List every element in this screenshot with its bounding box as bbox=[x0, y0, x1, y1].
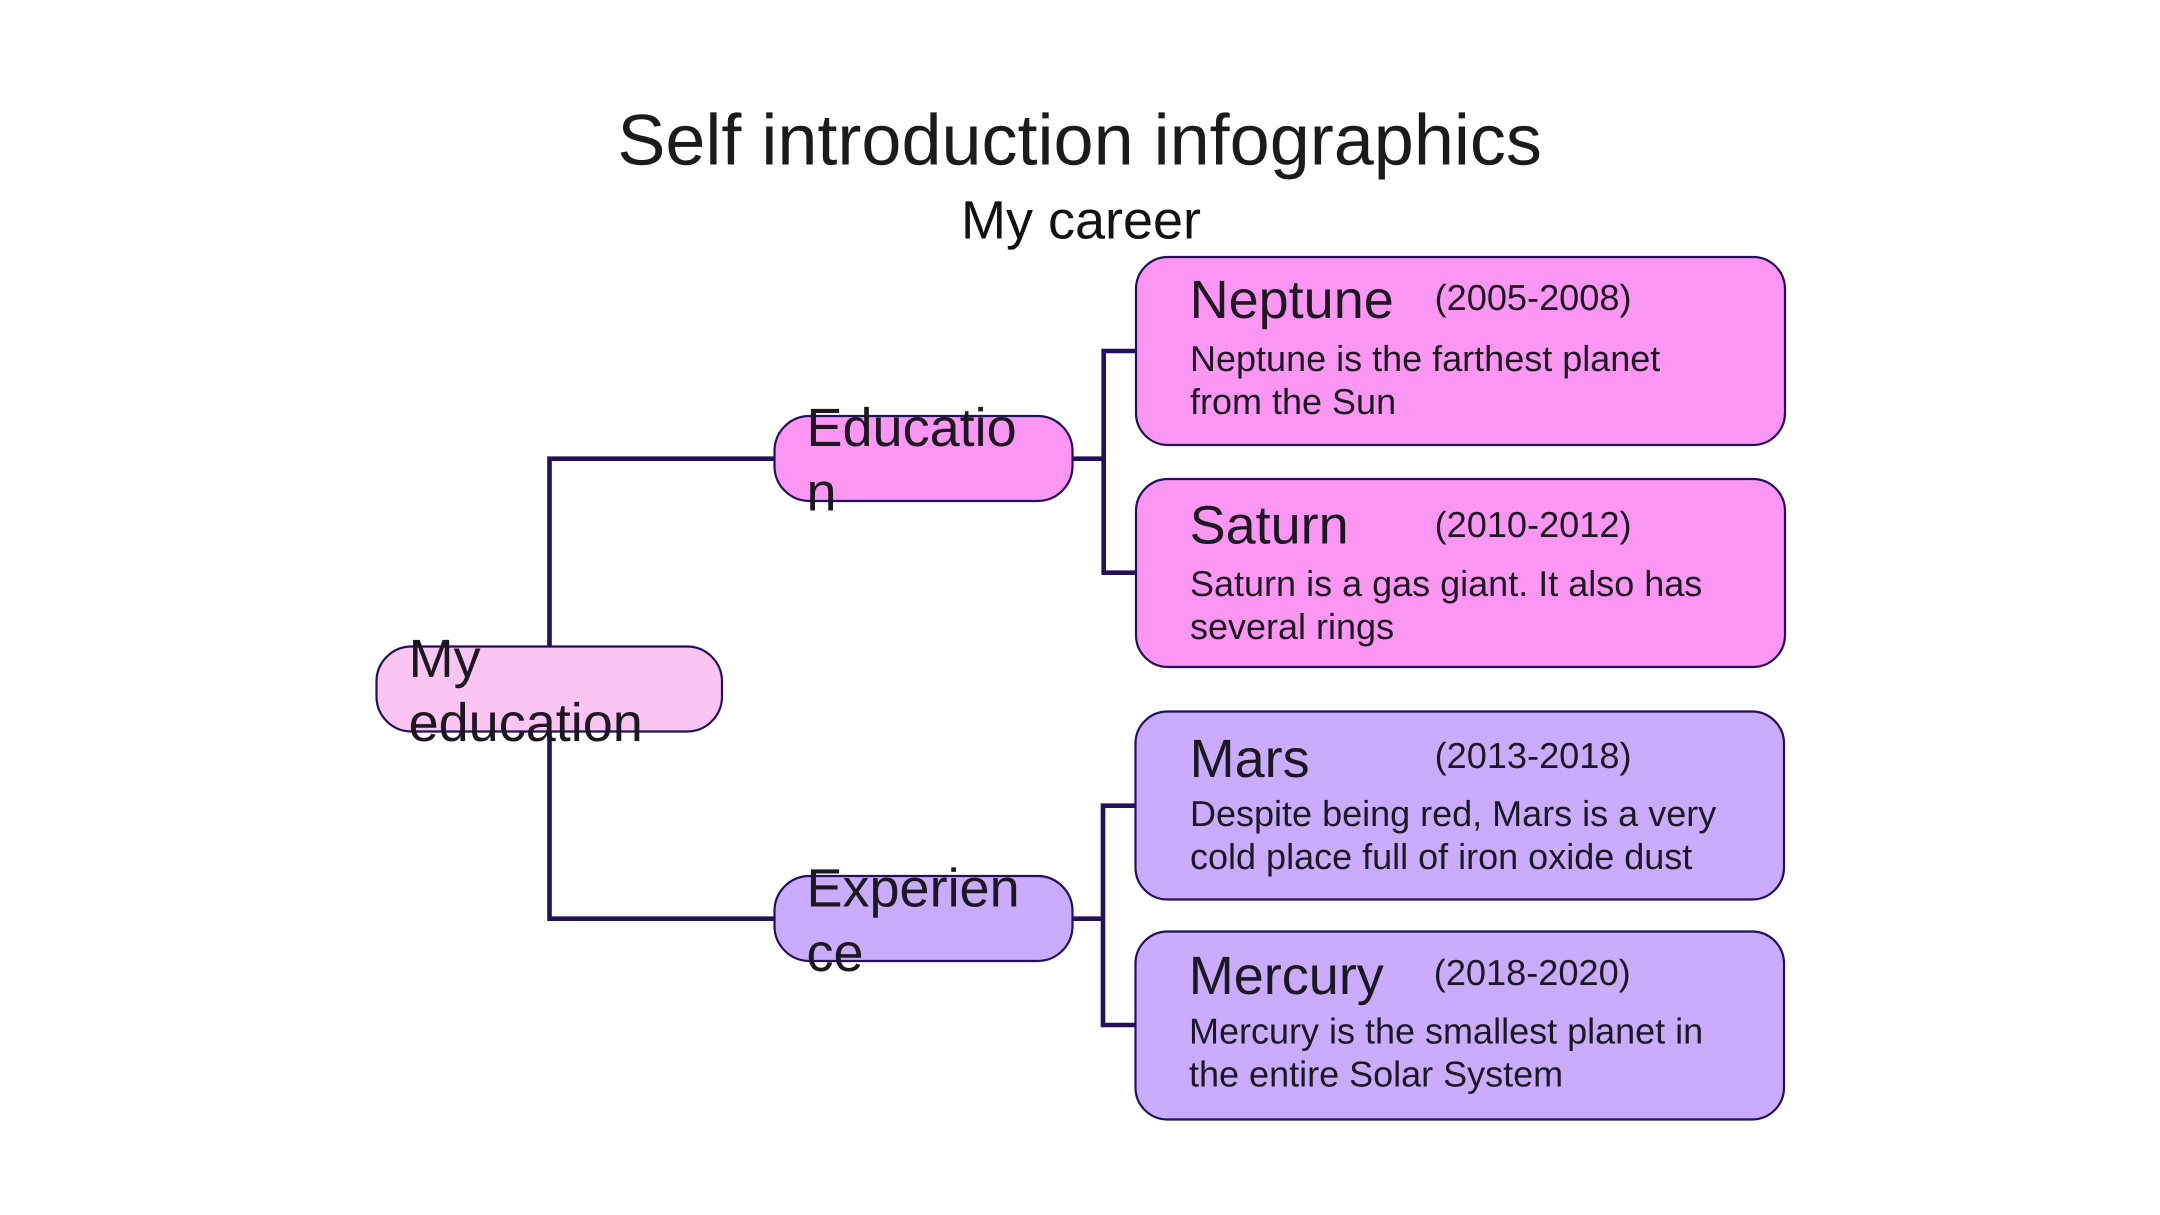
card: Neptune: Neptune is the farthest planet bbox=[1190, 338, 1660, 379]
card: Neptune: from the Sun bbox=[1190, 381, 1396, 422]
connector: experience to cards bbox=[1073, 806, 1135, 1025]
card: Mars: Mars bbox=[1190, 729, 1310, 789]
branch node: Education: n bbox=[806, 462, 837, 522]
card: Mercury: Mercury is the smallest planet in bbox=[1189, 1010, 1703, 1051]
connector: education to cards bbox=[1073, 351, 1136, 573]
branch node: Education bbox=[774, 398, 1072, 522]
card: Neptune: (2005-2008) bbox=[1435, 277, 1632, 318]
root node: My education: My bbox=[409, 629, 481, 689]
branch node: Experience: Experien bbox=[806, 858, 1020, 918]
card: Mercury: (2018-2020) bbox=[1434, 952, 1631, 993]
card: Mercury: the entire Solar System bbox=[1189, 1053, 1563, 1094]
card: Mars: cold place full of iron oxide dust bbox=[1190, 836, 1692, 877]
card: Mars bbox=[1136, 712, 1784, 900]
root node: My education: education bbox=[409, 693, 643, 753]
card: Saturn: Saturn is a gas giant. It also has bbox=[1190, 563, 1702, 604]
title: Self introduction infographics bbox=[617, 100, 1542, 180]
card: Saturn: (2010-2012) bbox=[1435, 504, 1632, 545]
card: Neptune bbox=[1136, 257, 1785, 445]
card: Saturn: several rings bbox=[1190, 606, 1394, 647]
connector: root to branches bbox=[550, 459, 775, 919]
subtitle: My career bbox=[961, 190, 1201, 250]
branch node: Education: Educatio bbox=[806, 398, 1017, 458]
branch node: Experience bbox=[774, 858, 1072, 983]
card: Mars: Despite being red, Mars is a very bbox=[1190, 793, 1716, 834]
card: Neptune: Neptune bbox=[1190, 270, 1394, 330]
card: Saturn: Saturn bbox=[1190, 495, 1349, 555]
card: Mercury bbox=[1136, 932, 1784, 1120]
branch node: Experience: ce bbox=[806, 923, 864, 983]
card: Saturn bbox=[1136, 479, 1785, 667]
card: Mercury: Mercury bbox=[1189, 946, 1384, 1006]
card: Mars: (2013-2018) bbox=[1435, 735, 1632, 776]
root node: My education bbox=[376, 629, 722, 753]
